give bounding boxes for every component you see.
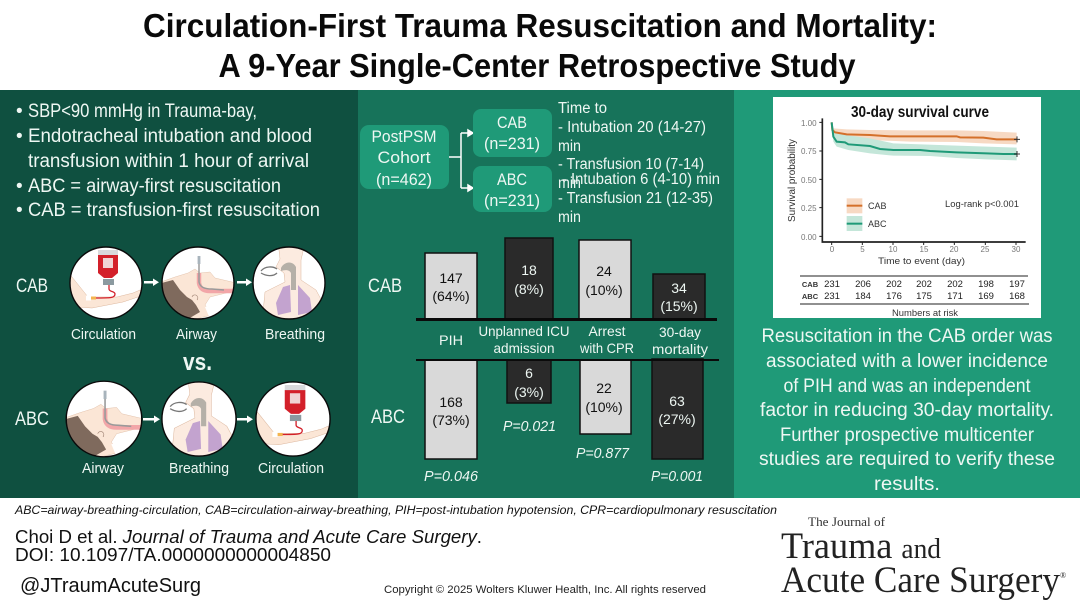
- numbers at risk table: 176: [886, 291, 902, 302]
- conclusion text: results.: [874, 474, 940, 495]
- title: A 9-Year Single-Center Retrospective Study: [218, 47, 856, 84]
- inclusion criteria text: •: [16, 200, 23, 221]
- outcome labels: Arrest: [588, 323, 626, 339]
- legend: ABC: [868, 219, 887, 229]
- axis labels: 15: [920, 245, 929, 254]
- CAB time to intervention: - Intubation 20 (14-27): [558, 119, 706, 136]
- conclusion text: Further prospective multicenter: [780, 425, 1035, 446]
- ABC group box: [473, 166, 552, 212]
- versus label: vs.: [183, 349, 212, 376]
- survival chart: [773, 97, 1041, 319]
- axis labels: 30: [1012, 245, 1021, 254]
- axis labels: 0.50: [801, 176, 817, 185]
- citation: Choi D et al. Journal of Trauma and Acute Care Surgery.: [15, 526, 482, 547]
- CAB sequence: Airway: [176, 326, 217, 343]
- CAB group box: [473, 109, 552, 157]
- numbers at risk table: 202: [916, 279, 932, 290]
- ABC bar chart: (3%): [514, 384, 544, 400]
- CAB bar chart: (10%): [585, 282, 623, 298]
- ABC sequence: Airway: [82, 460, 124, 477]
- survival chart: Time to event (day): [878, 256, 965, 267]
- numbers at risk table: Numbers at risk: [892, 308, 958, 319]
- citation: DOI: 10.1097/TA.0000000000004850: [15, 544, 331, 565]
- ABC bar chart: 22: [596, 380, 612, 396]
- ABC sequence: [15, 378, 332, 477]
- numbers at risk table: 202: [886, 279, 902, 290]
- CAB time to intervention: Time to: [558, 100, 607, 117]
- CAB time to intervention: [558, 100, 706, 192]
- axis labels: 5: [860, 245, 865, 254]
- survival curves: [819, 118, 1026, 245]
- CAB bar chart: 18: [521, 262, 537, 278]
- inclusion criteria text: CAB = transfusion-first resuscitation: [28, 200, 320, 221]
- outcome labels: Unplanned ICU: [478, 323, 570, 339]
- journal logo: The Journal of: [808, 514, 886, 529]
- cohort box: [360, 125, 449, 189]
- CAB time to intervention: min: [558, 138, 581, 155]
- numbers at risk table: 175: [916, 291, 932, 302]
- panel: study design and resuscitation order: [0, 90, 358, 498]
- outcome labels: 30-day: [659, 324, 701, 340]
- CAB group box: (n=231): [484, 134, 540, 153]
- CAB sequence: Circulation: [71, 326, 136, 343]
- numbers at risk table: 231: [824, 291, 840, 302]
- abbreviations footnote: ABC=airway-breathing-circulation, CAB=circulation-airway-breathing, PIH=post-intubation hypotension, CPR=cardiopulmonary resuscitation: [14, 503, 777, 517]
- journal logo: Acute Care Surgery: [781, 560, 1060, 601]
- ABC time to intervention: min: [558, 209, 581, 226]
- ABC time to intervention: - Transfusion 21 (12-35): [558, 190, 713, 207]
- axis labels: 10: [889, 245, 898, 254]
- axis labels: 0.75: [801, 147, 817, 156]
- cohort box: (n=462): [376, 170, 432, 189]
- P values: P=0.877: [576, 446, 630, 462]
- arrow: cohort split: [449, 130, 473, 191]
- numbers at risk table: CAB: [802, 280, 819, 289]
- axis labels: 0.00: [801, 233, 817, 242]
- numbers at risk table: 169: [978, 291, 994, 302]
- ABC bar chart: (27%): [658, 411, 696, 427]
- conclusion text: factor in reducing 30-day mortality.: [760, 400, 1054, 421]
- P values: P=0.021: [503, 419, 556, 435]
- CAB bar chart: 147: [439, 270, 463, 286]
- ABC time to intervention: - Intubation 6 (4-10) min: [562, 171, 720, 188]
- inclusion criteria text: [16, 101, 320, 221]
- group labels: CAB: [368, 276, 402, 297]
- legend: CAB: [868, 201, 887, 211]
- P values: P=0.001: [651, 469, 703, 485]
- cohort box: PostPSM: [372, 127, 436, 146]
- numbers at risk table: 198: [978, 279, 994, 290]
- ABC bar chart: (73%): [432, 412, 470, 428]
- copyright: Copyright © 2025 Wolters Kluwer Health, Inc. All rights reserved: [384, 584, 706, 596]
- conclusion text: associated with a lower incidence: [766, 351, 1048, 372]
- outcome labels: mortality: [652, 341, 708, 357]
- ABC sequence: ABC: [15, 409, 49, 430]
- axis labels: 20: [950, 245, 959, 254]
- P values: P=0.046: [424, 469, 479, 485]
- ABC bar chart: 6: [525, 365, 533, 381]
- group labels: ABC: [371, 407, 405, 428]
- journal logo: Trauma and: [781, 526, 941, 567]
- numbers at risk table: 171: [947, 291, 963, 302]
- outcome labels: admission: [494, 340, 554, 356]
- inclusion criteria text: SBP<90 mmHg in Trauma-bay,: [28, 101, 257, 122]
- axis labels: 0: [830, 245, 835, 254]
- ABC sequence: Breathing: [169, 460, 229, 477]
- CAB sequence: Breathing: [265, 326, 325, 343]
- journal logo: [781, 514, 1066, 601]
- title: Circulation-First Trauma Resuscitation and Mortality:: [143, 7, 937, 44]
- group labels: [368, 276, 405, 428]
- axis labels: 25: [981, 245, 990, 254]
- outcome labels: [439, 323, 708, 357]
- axis labels: 1.00: [801, 119, 817, 128]
- ABC bar chart: 63: [669, 393, 685, 409]
- numbers at risk table: 197: [1009, 279, 1025, 290]
- inclusion criteria text: ABC = airway-first resuscitation: [28, 176, 281, 197]
- CAB bar chart: (64%): [432, 288, 470, 304]
- panel: survival and conclusion: [734, 90, 1080, 498]
- CAB time to intervention: - Transfusion 10 (7-14): [558, 156, 704, 173]
- inclusion criteria text: transfusion within 1 hour of arrival: [28, 151, 309, 172]
- numbers at risk table: [800, 276, 1029, 319]
- numbers at risk table: 168: [1009, 291, 1025, 302]
- conclusion text: Resuscitation in the CAB order was: [762, 326, 1052, 347]
- CAB bar chart: 34: [671, 280, 687, 296]
- P values: [424, 419, 703, 485]
- numbers at risk table: 184: [855, 291, 871, 302]
- title: [143, 7, 937, 84]
- CAB bar chart: [416, 238, 717, 320]
- survival chart: Survival probability: [787, 139, 798, 222]
- CAB bar chart: (8%): [514, 281, 544, 297]
- ABC group box: ABC: [497, 170, 527, 189]
- ABC bar chart: (10%): [585, 399, 623, 415]
- CAB time to intervention: min: [558, 175, 581, 192]
- inclusion criteria text: •: [16, 126, 23, 147]
- chart title: 30-day survival curve: [851, 104, 989, 121]
- CAB bar chart: 24: [596, 263, 612, 279]
- ABC bar chart: [416, 359, 719, 459]
- ABC bar chart: 168: [439, 394, 463, 410]
- numbers at risk table: 206: [855, 279, 871, 290]
- citation: [15, 526, 482, 565]
- CAB sequence: CAB: [16, 276, 48, 297]
- inclusion criteria text: •: [16, 101, 23, 122]
- ABC sequence: Circulation: [258, 460, 324, 477]
- CAB sequence: [16, 243, 329, 343]
- ABC group box: (n=231): [484, 191, 540, 210]
- inclusion criteria text: •: [16, 176, 23, 197]
- numbers at risk table: 231: [824, 279, 840, 290]
- social handle: @JTraumAcuteSurg: [20, 575, 201, 597]
- CAB group box: CAB: [497, 113, 527, 132]
- cohort box: Cohort: [378, 148, 431, 167]
- axis labels: 0.25: [801, 204, 817, 213]
- outcome labels: PIH: [439, 332, 463, 348]
- inclusion criteria text: Endotracheal intubation and blood: [28, 126, 312, 147]
- conclusion text: [759, 326, 1055, 495]
- panel: cohort and outcomes: [358, 90, 734, 498]
- axis labels: [801, 119, 1021, 254]
- survival chart: Log-rank p<0.001: [945, 199, 1019, 209]
- journal logo: ®: [1060, 571, 1066, 580]
- ABC time to intervention: [558, 171, 720, 226]
- outcome labels: with CPR: [579, 340, 634, 356]
- CAB bar chart: (15%): [660, 298, 698, 314]
- conclusion text: studies are required to verify these: [759, 449, 1055, 470]
- conclusion text: of PIH and was an independent: [784, 376, 1031, 397]
- legend: [868, 201, 887, 229]
- numbers at risk table: ABC: [802, 292, 819, 301]
- numbers at risk table: 202: [947, 279, 963, 290]
